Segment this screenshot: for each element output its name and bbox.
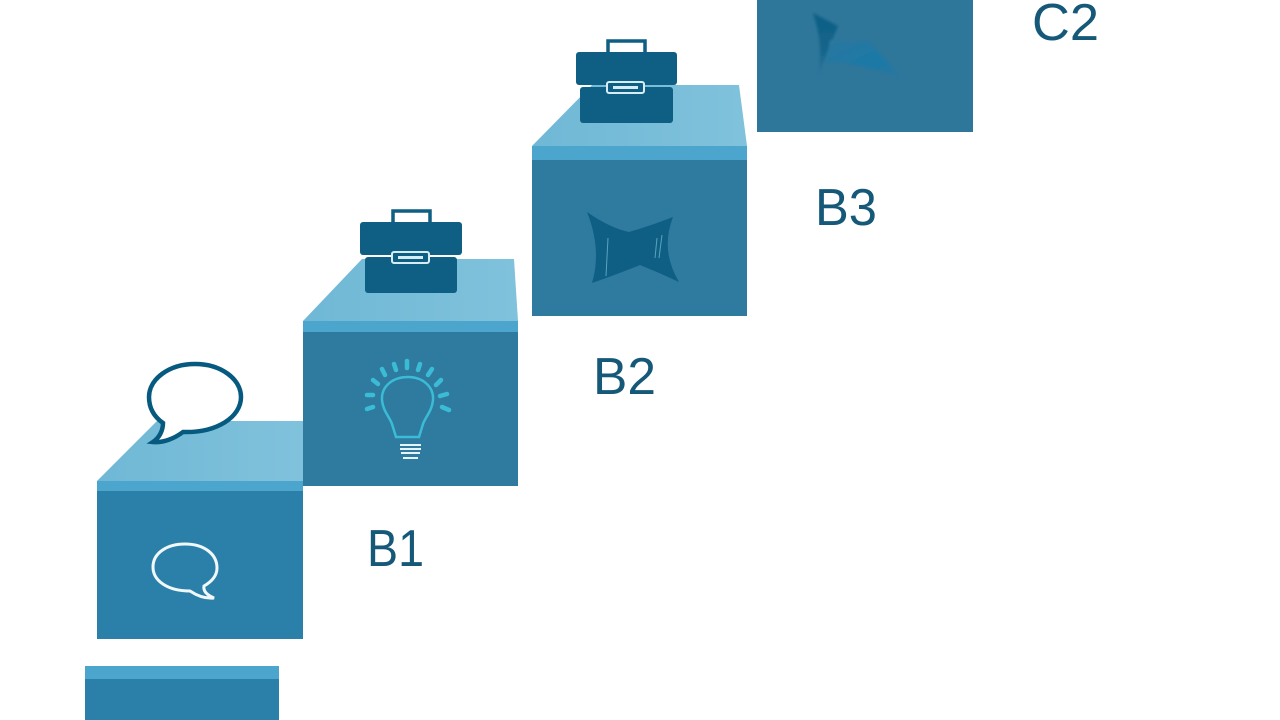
icon: dark bow shape xyxy=(587,212,679,283)
icon: briefcase on step B2 xyxy=(360,211,462,293)
label: B3: B3 xyxy=(815,179,877,237)
step C2 block xyxy=(757,0,973,132)
icon: white speech bubble xyxy=(153,544,217,598)
step B1 base: conversation block xyxy=(97,421,303,639)
icon: large dark speech bubble xyxy=(149,364,241,442)
label: B2: B2 xyxy=(593,348,656,406)
icon: light bulb xyxy=(367,361,449,458)
step B3 block xyxy=(532,85,747,316)
step B2 block xyxy=(303,259,518,486)
label: B1: B1 xyxy=(367,520,424,578)
icon: partly drawn bow shape xyxy=(813,13,905,80)
step A: bottom partial block xyxy=(85,666,279,720)
icon: briefcase on step B3 xyxy=(576,41,677,123)
